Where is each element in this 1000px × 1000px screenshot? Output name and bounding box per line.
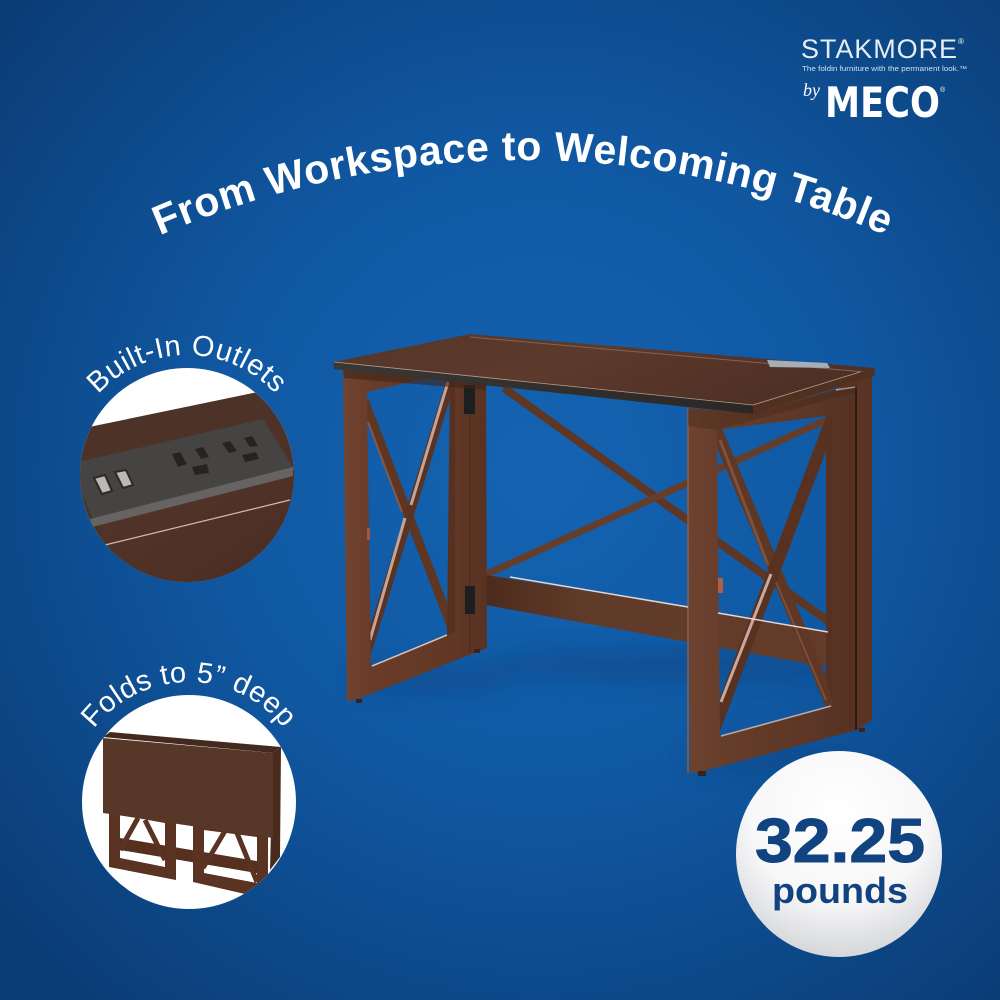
table top surface	[333, 334, 875, 405]
left frame stile seam and hinges	[343, 370, 486, 666]
right frame details	[510, 384, 857, 773]
table top seam	[470, 337, 865, 372]
left X brace	[364, 374, 456, 655]
weight unit: pounds	[772, 870, 908, 911]
left frame	[343, 370, 487, 702]
right frame	[688, 383, 857, 773]
table top right edge	[753, 368, 875, 414]
folded legs right	[193, 826, 268, 894]
folded tabletop panel	[103, 738, 273, 838]
feature: folds label: Folds to 5” deep	[80, 662, 292, 727]
USB ports	[94, 470, 133, 494]
back cross brace	[487, 388, 828, 621]
logo: Stakmore by Meco: MECO	[825, 78, 940, 127]
title: curved heading: From Workspace to Welcoming Table	[152, 132, 890, 234]
AC sockets	[172, 436, 259, 475]
folded top cap	[103, 732, 281, 753]
wood desk surface	[80, 392, 294, 582]
weight number: 32.25	[755, 807, 925, 876]
logo: Stakmore by Meco: ®	[940, 86, 946, 94]
outlet plate front edge	[90, 467, 293, 527]
weight badge	[736, 751, 942, 957]
table top front edge	[333, 362, 753, 414]
feet	[356, 649, 865, 776]
power outlet on top	[767, 360, 830, 368]
outlet plate	[70, 419, 293, 520]
folded stretcher rail	[120, 838, 268, 875]
right back panel	[840, 375, 872, 730]
feature: built-in outlets label: Built-In Outlets	[86, 336, 284, 392]
folded X braces	[120, 818, 257, 882]
folded side panel	[270, 747, 281, 870]
feature circle: outlets photo	[80, 368, 294, 582]
stretcher rail	[480, 574, 828, 665]
folded legs left	[109, 814, 176, 880]
logo: Stakmore by Meco: by	[803, 80, 820, 100]
logo: Stakmore by Meco: The foldin furniture with the permanent look.™	[802, 66, 967, 73]
right X brace	[712, 402, 838, 730]
logo: Stakmore by Meco: ®	[958, 37, 964, 46]
floor shadow under table	[350, 651, 860, 770]
product photo: folding table	[333, 334, 875, 776]
feature circle: folded table photo	[80, 690, 300, 915]
seam line	[105, 500, 290, 545]
logo: Stakmore by Meco: STAKMORE	[801, 34, 957, 64]
logo: Stakmore by Meco	[801, 34, 967, 127]
